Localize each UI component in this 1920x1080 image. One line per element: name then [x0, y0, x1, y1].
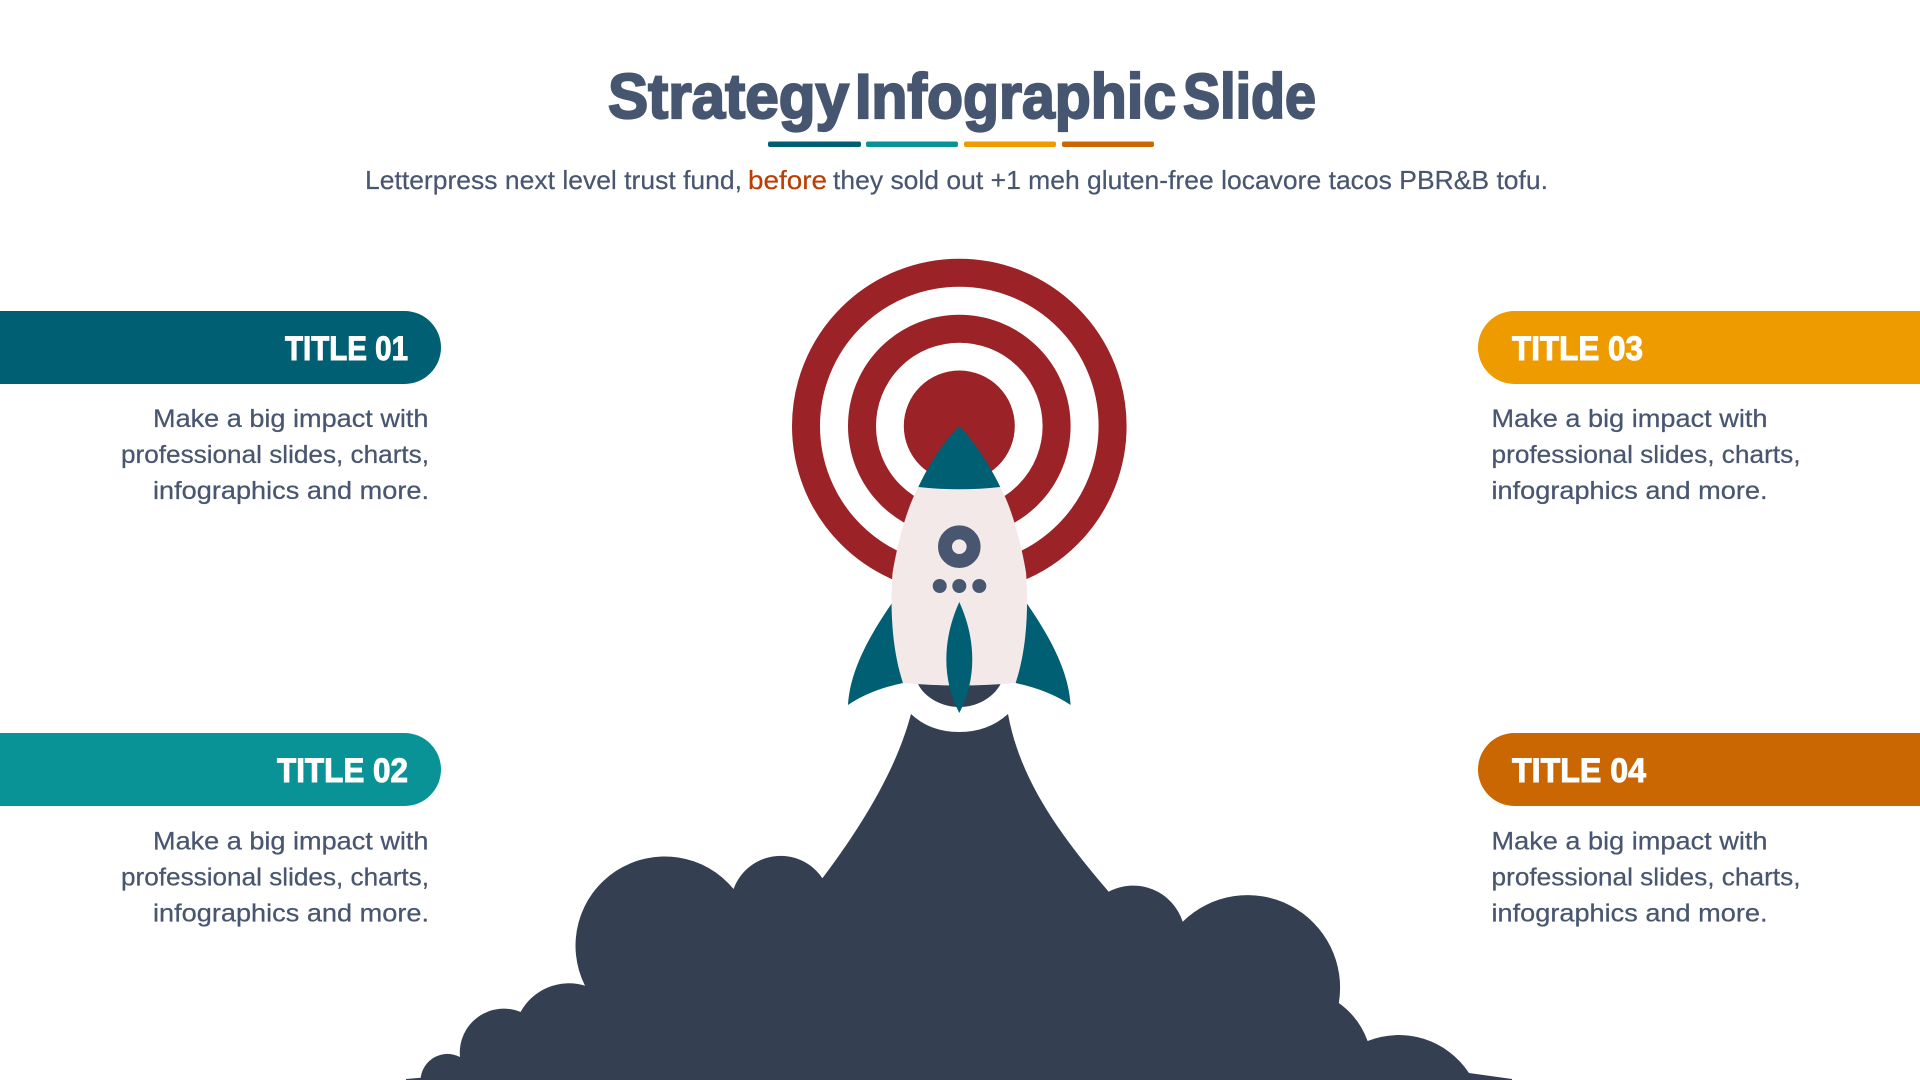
banner: title 03	[1478, 311, 1920, 384]
title: Slide	[1183, 62, 1316, 132]
subtitle: Letterpress next level trust fund,	[365, 165, 742, 195]
title underline	[768, 142, 1154, 147]
panel: title 02	[0, 733, 441, 928]
title	[608, 62, 1316, 132]
text block: title 04	[1492, 828, 1800, 928]
text block: title 03: infographics and more.	[1492, 477, 1768, 505]
panel: title 04	[1478, 733, 1920, 928]
text block: title 03	[1492, 405, 1800, 505]
banner: title 01: TITLE 01	[285, 330, 408, 368]
banner: title 03: TITLE 03	[1512, 330, 1643, 368]
text block: title 03: professional slides, charts,	[1492, 441, 1800, 469]
text block: title 01: infographics and more.	[153, 477, 429, 505]
text block: title 02: infographics and more.	[153, 900, 429, 928]
text block: title 02: professional slides, charts,	[121, 864, 429, 892]
panel: title 03	[1478, 311, 1920, 505]
text block: title 01: Make a big impact with	[153, 405, 428, 433]
dots	[933, 579, 986, 593]
banner: title 04	[1478, 733, 1920, 806]
text block: title 02: Make a big impact with	[153, 828, 428, 856]
text block: title 03: Make a big impact with	[1492, 405, 1768, 433]
subtitle: before	[748, 165, 827, 195]
banner: title 04: TITLE 04	[1512, 752, 1646, 790]
porthole	[945, 532, 974, 561]
text block: title 01: professional slides, charts,	[121, 441, 429, 469]
nose cone	[918, 426, 1000, 489]
centre fin	[946, 602, 972, 713]
banner: title 01	[0, 311, 441, 384]
title: Strategy	[608, 62, 849, 132]
banner: title 02: TITLE 02	[277, 752, 408, 790]
rocket body	[892, 487, 1027, 686]
panel: title 01	[0, 311, 441, 505]
target rings	[806, 273, 1113, 579]
subtitle: they sold out +1 meh gluten-free locavore tacos PBR&B tofu.	[833, 165, 1548, 195]
text block: title 01	[121, 405, 429, 505]
text block: title 04: Make a big impact with	[1492, 828, 1768, 856]
smoke cloud	[406, 714, 1512, 1080]
text block: title 02	[121, 828, 429, 928]
text block: title 04: infographics and more.	[1492, 900, 1768, 928]
subtitle	[365, 165, 1548, 195]
text block: title 04: professional slides, charts,	[1492, 864, 1800, 892]
left fin	[848, 603, 903, 705]
banner: title 02	[0, 733, 441, 806]
engine	[918, 684, 1001, 707]
right fin	[1016, 603, 1071, 705]
title: Infographic	[855, 62, 1176, 132]
rocket	[848, 426, 1071, 713]
